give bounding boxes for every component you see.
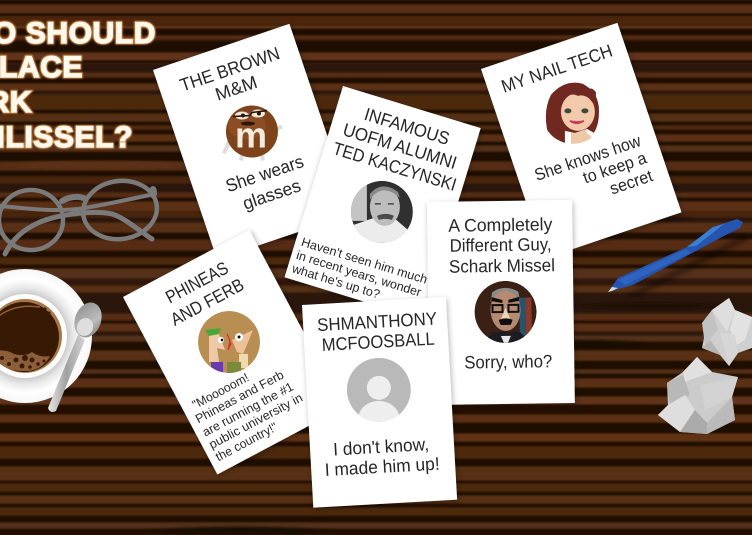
- heading: Phineas and Ferb: [157, 255, 247, 330]
- heading: Phineas and Ferb: PHINEAS: [162, 258, 232, 307]
- icon: woman avatar: [546, 83, 599, 144]
- heading: The Brown M&M: M&M: [213, 72, 260, 105]
- heading: Infamous UofM alumni Ted Kaczynski: TED KACZYNSKI: [331, 138, 459, 195]
- text: Mooooom quote: the country!": [213, 420, 280, 464]
- text: She wears glasses: glasses: [240, 175, 303, 214]
- icon: crumpled paper ball top: [702, 298, 752, 366]
- text: I don't know, I made him up!: I made him up!: [324, 454, 440, 480]
- text: Haven't seen him much: [290, 234, 429, 314]
- photo: Ted Kaczynski portrait: [351, 181, 413, 243]
- text: Haven't seen him much: what he's up to?: [290, 261, 382, 302]
- heading: Infamous UofM alumni Ted Kaczynski: [331, 98, 471, 195]
- title glow: [0, 17, 156, 154]
- icon: brown M&M character: m: [235, 115, 267, 156]
- text: She knows how to keep a secret: to keep a: [580, 148, 650, 187]
- text: I don't know, I made him up!: I don't know,: [333, 434, 430, 459]
- panel: A Completely Different Guy card: [427, 200, 575, 405]
- heading: A Completely Different Guy, Schark Missel: Different Guy,: [449, 234, 552, 256]
- heading: My Nail Tech: MY NAIL TECH: [499, 41, 615, 97]
- text: Mooooom quote: [186, 353, 312, 464]
- text: Mooooom quote: public university in: [207, 391, 305, 452]
- icon: eyeglasses: [0, 176, 161, 254]
- heading: Infamous UofM alumni Ted Kaczynski: INFAMOUS: [362, 104, 452, 149]
- text: She knows how to keep a secret: [532, 131, 656, 220]
- icon: crumpled paper ball bottom: [658, 357, 738, 434]
- icon: coffee cup on saucer: [0, 269, 106, 412]
- text: Mooooom quote: "Mooooom!: [190, 370, 251, 412]
- text: She knows how to keep a secret: She knows how: [532, 131, 644, 185]
- panel: Shmanthony McFoosball card: [302, 297, 457, 508]
- heading: A Completely Different Guy, Schark Missel: Schark Missel: [449, 255, 555, 277]
- panel: Phineas and Ferb card: [123, 229, 309, 476]
- panel: Infamous UofM alumni card: [285, 86, 481, 319]
- icon: spoon: [48, 299, 106, 412]
- text: Haven't seen him much: Haven't seen him much: [300, 235, 429, 287]
- title text: [0, 17, 156, 154]
- text: I don't know, I made him up!: [323, 434, 440, 480]
- heading: Shmanthony McFoosball: [317, 309, 439, 355]
- text: Haven't seen him much: in recent years, wonder: [295, 248, 423, 300]
- heading: Shmanthony McFoosball: SHMANTHONY: [317, 309, 438, 335]
- text: Mooooom quote: are running the #1: [200, 380, 296, 439]
- text: She wears glasses: She wears: [223, 151, 306, 196]
- icon: blue pen: [608, 219, 748, 296]
- panel: My Nail Tech card: [481, 23, 682, 258]
- panel: The Brown M&M card: [153, 24, 354, 259]
- heading: A Completely Different Guy, Schark Missel: A Completely: [448, 214, 552, 236]
- title: [0, 17, 156, 154]
- photo: man with novelty glasses: [474, 280, 537, 343]
- text: Sorry, who?: Sorry, who?: [464, 351, 552, 372]
- icon: placeholder avatar: [347, 358, 411, 422]
- heading: A Completely Different Guy, Schark Missel: [448, 214, 555, 277]
- text: Mooooom quote: Phineas and Ferb: [193, 368, 286, 426]
- heading: Phineas and Ferb: AND FERB: [167, 274, 247, 330]
- icon: brown M&M character: [224, 106, 282, 161]
- icon: Phineas and Ferb cartoon: [198, 311, 260, 374]
- heading: Shmanthony McFoosball: MCFOOSBALL: [321, 329, 435, 355]
- text: She wears glasses: [223, 151, 313, 217]
- heading: The Brown M&M: THE BROWN: [177, 43, 282, 95]
- text: She knows how to keep a secret: secret: [607, 166, 655, 198]
- heading: Infamous UofM alumni Ted Kaczynski: UOFM ALUMNI: [341, 119, 459, 173]
